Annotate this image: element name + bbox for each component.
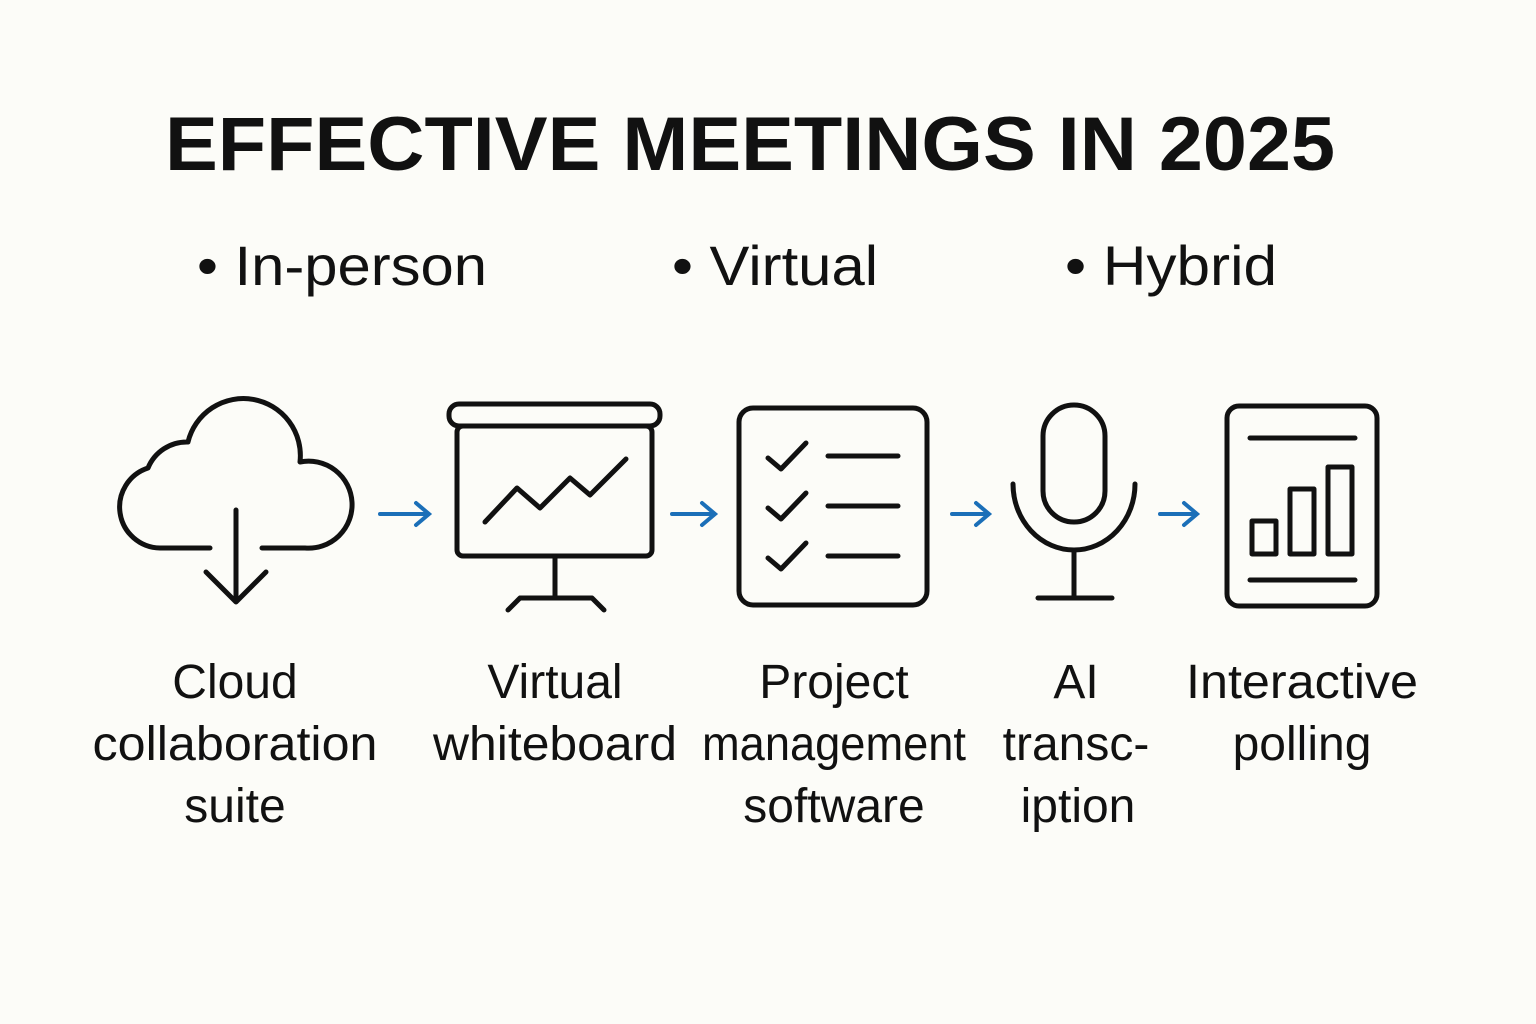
arrow 4 bbox=[1160, 503, 1197, 525]
icon: polling chart bbox=[1227, 406, 1377, 606]
title: EFFECTIVE MEETINGS IN 2025 bbox=[165, 102, 1335, 187]
labels: Virtual bbox=[487, 656, 623, 709]
labels: suite bbox=[184, 780, 286, 833]
labels: software bbox=[743, 780, 925, 833]
labels: Cloud bbox=[172, 656, 298, 709]
arrow 2 bbox=[672, 503, 715, 525]
labels: management bbox=[702, 718, 966, 771]
icon: microphone bbox=[1013, 405, 1135, 598]
labels: Project bbox=[759, 656, 909, 709]
labels: transc- bbox=[1003, 718, 1149, 771]
bullet list: meeting types: • In-person bbox=[197, 234, 487, 297]
icon: whiteboard bbox=[449, 404, 660, 610]
arrow 3 bbox=[952, 503, 989, 525]
labels: collaboration bbox=[92, 718, 378, 771]
labels: AI bbox=[1053, 656, 1099, 709]
bullet list: meeting types: • Virtual bbox=[672, 234, 878, 297]
arrow 1 bbox=[380, 503, 429, 525]
bullet list: meeting types: • Hybrid bbox=[1065, 234, 1277, 297]
labels: iption bbox=[1021, 780, 1135, 833]
labels bbox=[92, 656, 1418, 833]
bullet list: meeting types bbox=[197, 234, 1277, 297]
icon: cloud download bbox=[120, 399, 352, 602]
labels: Interactive bbox=[1186, 656, 1418, 709]
labels: polling bbox=[1233, 718, 1371, 771]
labels: whiteboard bbox=[432, 718, 677, 771]
icon: checklist bbox=[739, 408, 927, 605]
